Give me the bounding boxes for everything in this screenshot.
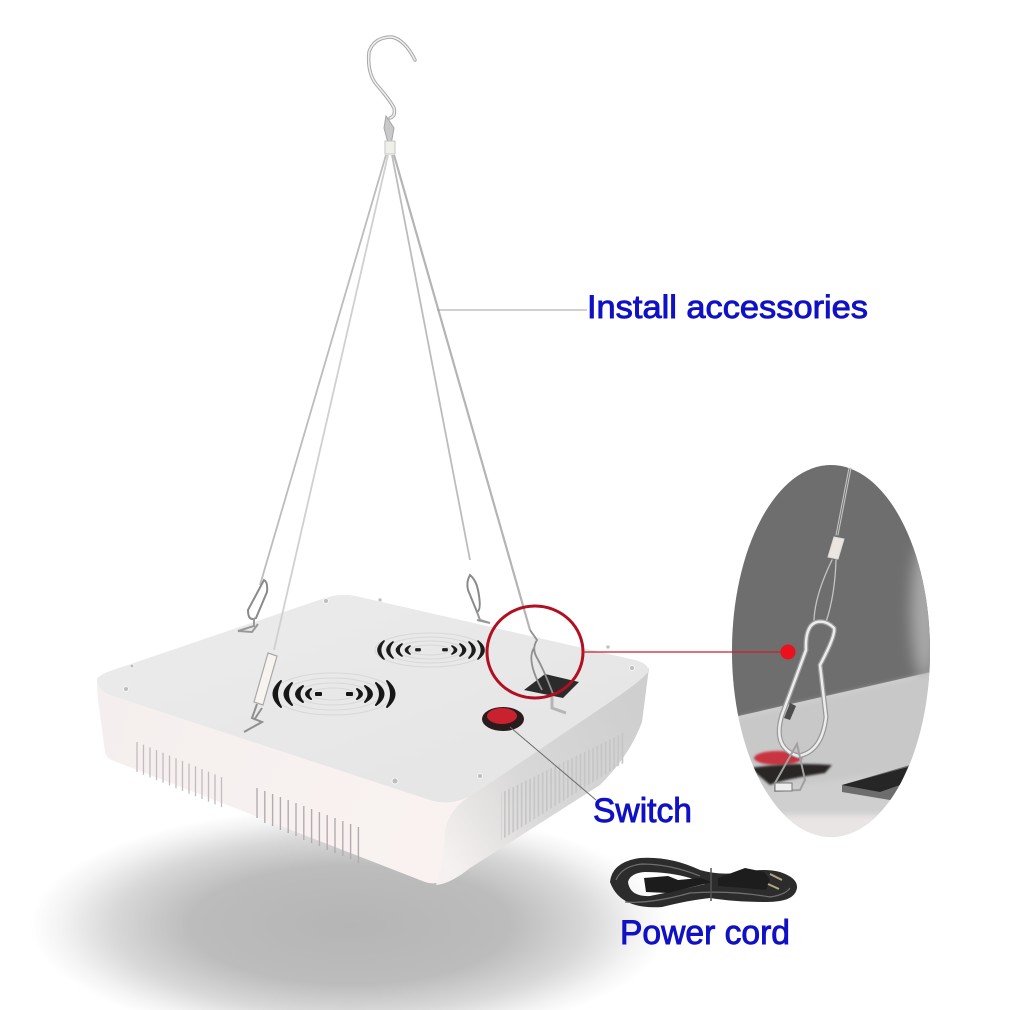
crimp sleeve: [828, 537, 844, 559]
red leader line: [583, 651, 790, 653]
left side face: [97, 677, 470, 883]
front left wire clip: [244, 653, 277, 732]
leader: switch: [510, 727, 596, 800]
vent slots: right side: [501, 732, 625, 840]
hanging hook: [369, 37, 415, 154]
plug pins: [768, 874, 782, 889]
rocker switch: [482, 707, 524, 731]
fan grille rear: [375, 633, 485, 667]
male plug: [718, 868, 770, 890]
right side face: [436, 668, 649, 885]
carabiner: [779, 622, 834, 756]
label: power cord: Power cord: [620, 914, 790, 952]
blurred highlight on wall: [904, 546, 930, 676]
leader: install accessories: [437, 309, 587, 311]
label: install accessories: Install accessories: [587, 289, 868, 325]
pale table edge: [784, 814, 878, 837]
cord highlights: [616, 864, 790, 902]
carabiner highlight: [779, 622, 834, 756]
cable tie: [710, 868, 712, 901]
lamp housing: [97, 595, 649, 885]
corner screws: [124, 598, 634, 784]
triangle sleeve: [775, 783, 792, 791]
red dot: [780, 644, 796, 660]
vent slots: left group: [137, 742, 222, 807]
wire loop: [814, 560, 836, 622]
power socket: [524, 674, 579, 698]
socket top: [842, 767, 908, 792]
right rear carabiner: [467, 575, 490, 623]
socket plate: [842, 765, 910, 802]
floor shadow: [30, 805, 680, 1010]
triangle link: [775, 744, 805, 791]
carabiner sleeve: [784, 703, 796, 720]
front right carabiner in circle: [530, 630, 566, 713]
female connector: [644, 876, 712, 893]
blurred lit surface: [738, 672, 929, 788]
power cord photo: [610, 858, 797, 907]
wire: [836, 468, 851, 535]
black switch base blur: [750, 764, 832, 785]
dark wall: [732, 465, 930, 716]
suspension wires: [260, 155, 530, 650]
top face: [97, 595, 648, 802]
label: switch: Switch: [593, 792, 692, 830]
fan grille front: [273, 673, 394, 715]
vent slots: centre group: [257, 788, 358, 863]
cord bundle: [610, 858, 797, 907]
oval background: [732, 465, 930, 837]
highlight circle: [487, 606, 583, 698]
detail oval photo: [732, 465, 930, 837]
red switch blur: [754, 751, 802, 765]
detail oval hardware: [775, 468, 851, 791]
left rear carabiner: [238, 580, 267, 632]
